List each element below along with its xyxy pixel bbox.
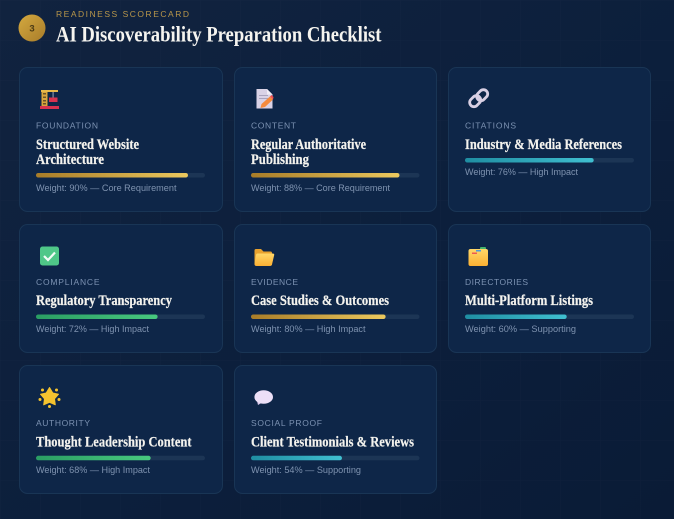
- progress bar 76%: [465, 158, 634, 162]
- category label: AUTHORITY: [36, 418, 90, 428]
- category label: CONTENT: [251, 120, 296, 130]
- weight caption: Weight: 54% — Supporting: [251, 465, 361, 476]
- category label: CITATIONS: [465, 120, 516, 130]
- card heading: Client Testimonials & Reviews: [251, 435, 414, 451]
- progress bar 80%: [251, 314, 420, 319]
- progress bar 72%: [36, 314, 205, 319]
- card heading: Industry & Media References: [465, 137, 622, 153]
- card heading: [251, 137, 366, 168]
- step number badge: [18, 14, 46, 42]
- weight caption: Weight: 90% — Core Requirement: [36, 183, 177, 194]
- panel: compliance card: [20, 224, 222, 352]
- panel: authority card: [20, 366, 222, 494]
- icon: speech bubble: [254, 390, 273, 405]
- card heading: [36, 137, 139, 168]
- card heading: Publishing: [251, 152, 309, 168]
- category label: COMPLIANCE: [36, 277, 100, 287]
- icon: green check mark box: [40, 246, 59, 266]
- progress bar 54%: [251, 456, 420, 460]
- panel: citations card: [448, 68, 650, 212]
- panel: directories card: [448, 224, 650, 352]
- card heading: Thought Leadership Content: [36, 435, 192, 451]
- weight caption: Weight: 76% — High Impact: [465, 167, 578, 178]
- panel: foundation card: [20, 68, 222, 212]
- panel: evidence card: [234, 224, 436, 352]
- icon: glowing star: [38, 388, 60, 408]
- panel: social proof card: [234, 366, 436, 494]
- progress bar 90%: [36, 173, 205, 178]
- card heading: Case Studies & Outcomes: [251, 293, 389, 309]
- card heading: Structured Website: [36, 137, 139, 153]
- weight caption: Weight: 60% — Supporting: [465, 324, 576, 335]
- card heading: Architecture: [36, 152, 104, 168]
- panel: content card: [234, 68, 436, 212]
- progress bar 68%: [36, 456, 205, 460]
- weight caption: Weight: 72% — High Impact: [36, 324, 149, 335]
- weight caption: Weight: 68% — High Impact: [36, 465, 150, 476]
- icon: building construction crane: [40, 90, 59, 109]
- header: [18, 9, 382, 46]
- progress bar 60%: [465, 314, 634, 319]
- card heading: Regular Authoritative: [251, 137, 366, 153]
- category label: FOUNDATION: [36, 120, 98, 130]
- category label: SOCIAL PROOF: [251, 418, 322, 428]
- progress bar 88%: [251, 173, 420, 178]
- card heading: Regulatory Transparency: [36, 293, 172, 309]
- step number badge: 3: [29, 24, 35, 34]
- icon: chain link: [468, 88, 489, 108]
- icon: card index dividers: [468, 247, 488, 266]
- category label: DIRECTORIES: [465, 277, 528, 287]
- weight caption: Weight: 88% — Core Requirement: [251, 183, 390, 194]
- icon: memo and pencil: [256, 89, 274, 108]
- category label: EVIDENCE: [251, 277, 298, 287]
- weight caption: Weight: 80% — High Impact: [251, 324, 366, 335]
- eyebrow label: READINESS SCORECARD: [56, 9, 189, 19]
- card heading: Multi-Platform Listings: [465, 293, 593, 309]
- icon: folder: [254, 249, 274, 266]
- title: AI Discoverability Preparation Checklist: [56, 22, 382, 46]
